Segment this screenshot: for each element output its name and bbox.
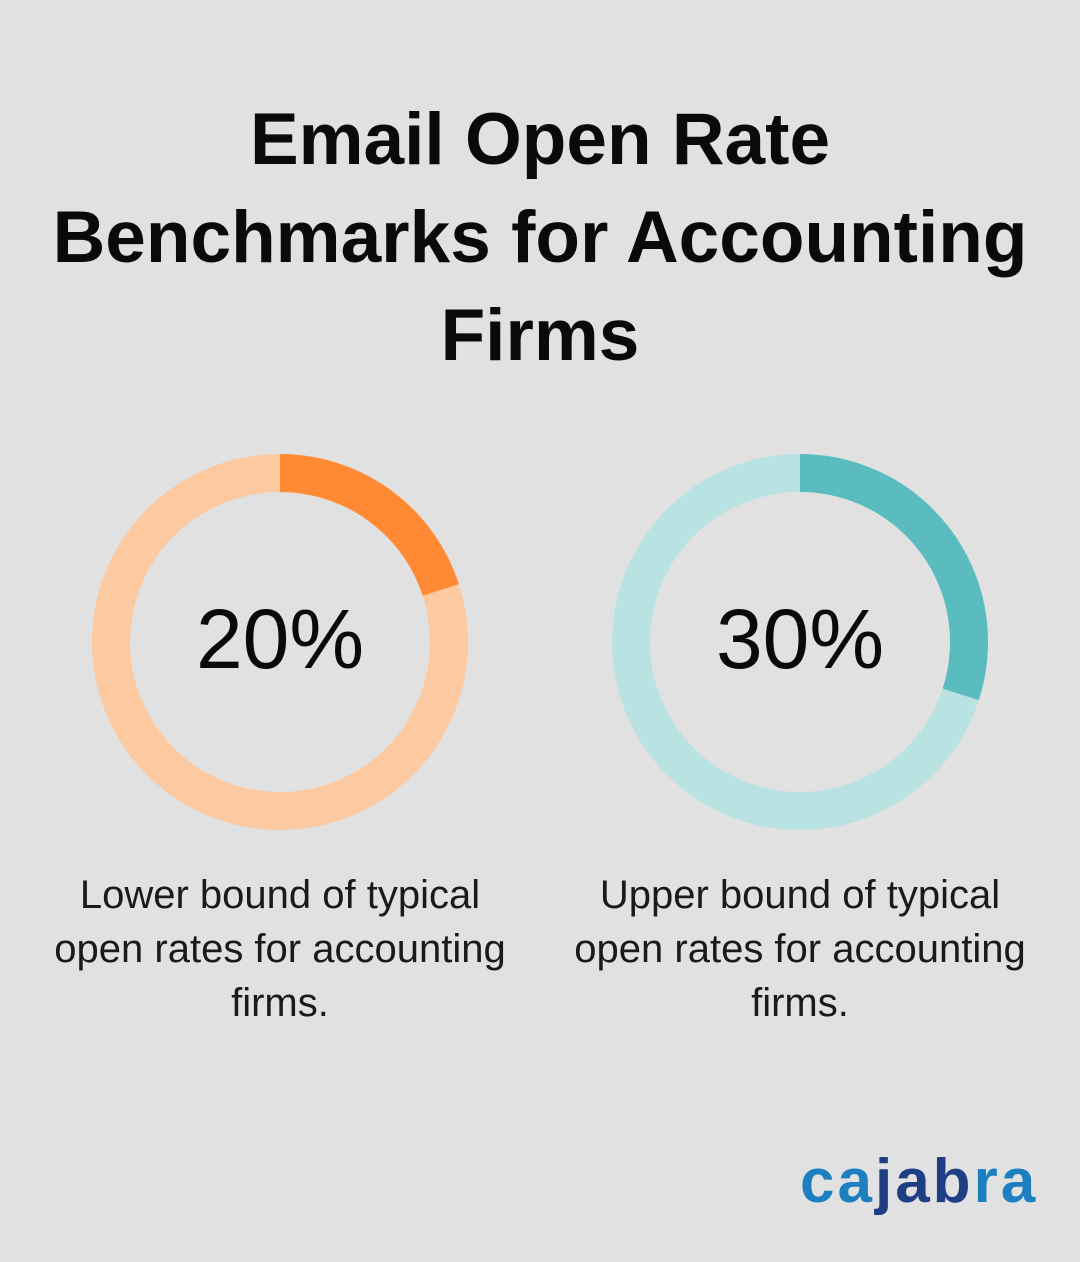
donut: 20%: 20% [196,592,364,686]
text: upper bound: Upper bound of typical [600,873,1000,917]
logo: cajabra [800,1147,1038,1216]
title: Firms [441,295,639,376]
text: upper bound: open rates for accounting [574,927,1026,971]
title [53,99,1027,376]
text: lower bound: firms. [231,981,329,1025]
text: upper bound [574,873,1026,1025]
text: lower bound: open rates for accounting [54,927,506,971]
text: lower bound [54,873,506,1025]
donut: 20% [92,454,468,830]
text: upper bound: firms. [751,981,849,1025]
title: Email Open Rate [250,99,830,180]
donut: 30% [612,454,988,830]
title: Benchmarks for Accounting [53,197,1027,278]
donut: 30%: 30% [716,592,884,686]
text: lower bound: Lower bound of typical [80,873,480,917]
